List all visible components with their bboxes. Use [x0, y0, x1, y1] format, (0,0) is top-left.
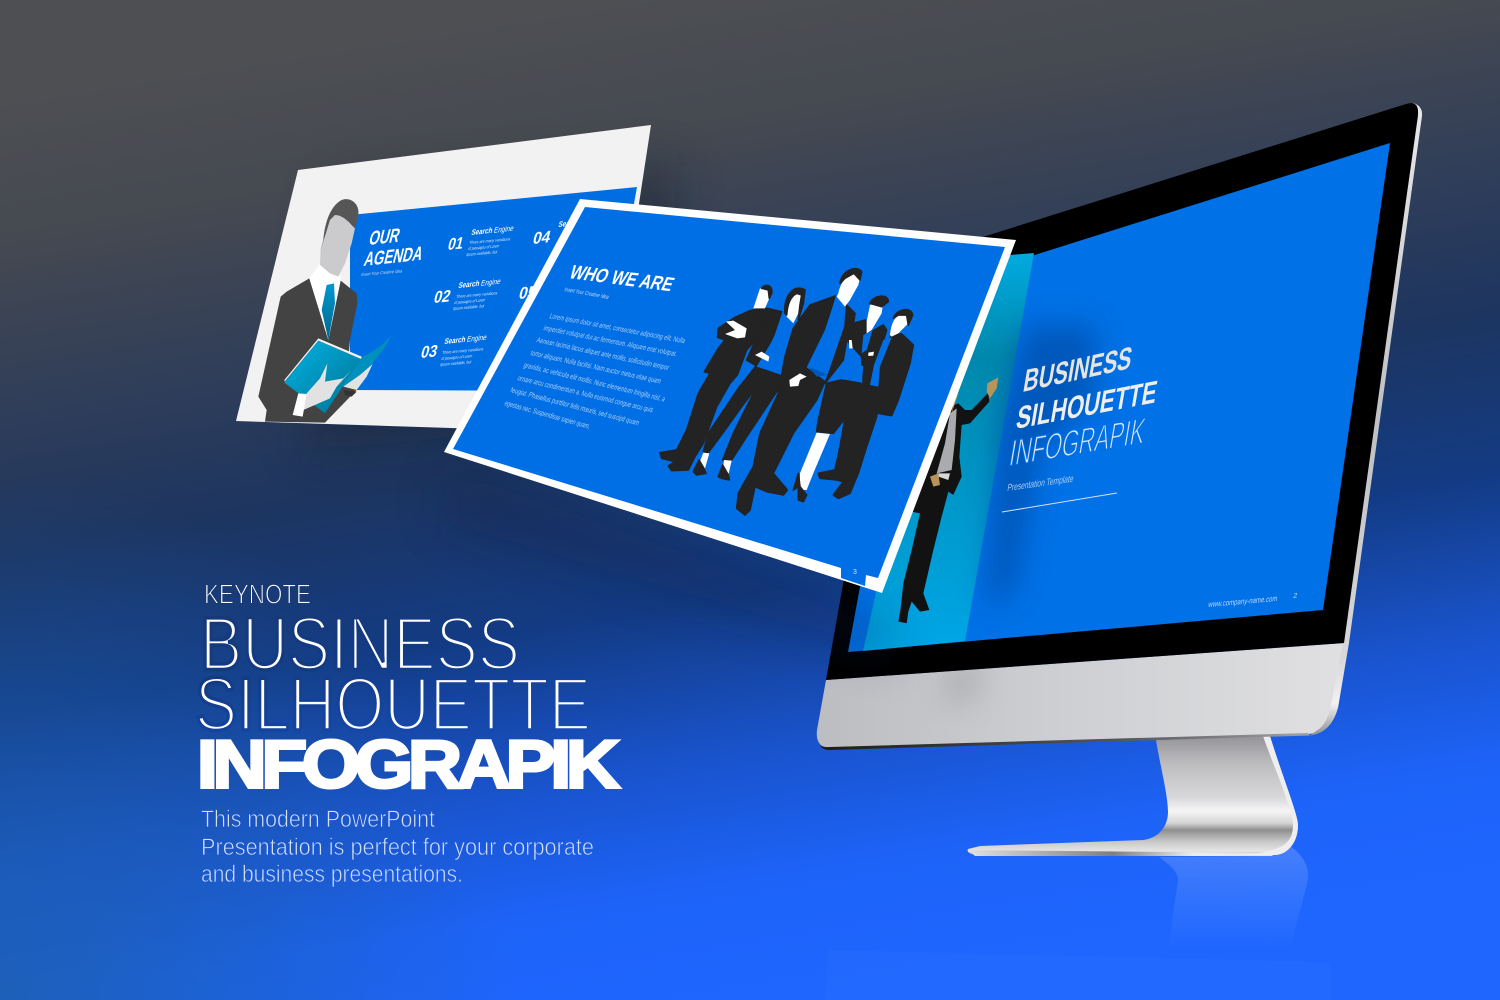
agenda heading: OUR	[367, 225, 402, 250]
agenda numbers	[419, 227, 553, 362]
agenda item details: Ipsum available, but	[466, 249, 499, 257]
agenda heading	[361, 225, 425, 277]
agenda item labels: Search Engine	[558, 216, 602, 229]
silhouette: SILHOUETTE	[195, 662, 591, 746]
team silhouette	[660, 269, 913, 515]
agenda item details: There are many variations	[456, 290, 499, 299]
agenda numbers: 05	[517, 282, 539, 303]
agenda item details: of passages of Lorem	[454, 297, 486, 305]
agenda item details: There are many variations	[442, 346, 485, 355]
page number: 3	[853, 569, 857, 576]
body copy: ornare arcu condimentum a. Nulla euismod congue arcu quis	[516, 373, 655, 414]
description	[201, 806, 594, 888]
infograpik: INFOGRAPIK	[197, 727, 619, 803]
body copy: egestas nec. Suspendisse sapien quam,	[503, 398, 592, 431]
body copy: gravida, ac vehicula elit mollis. Nunc elementum fringilla nisl, a	[522, 360, 668, 404]
agenda item labels: Search Engine	[471, 224, 515, 237]
monitor reflection on floor	[825, 846, 1330, 1000]
description: This modern PowerPoint	[201, 806, 435, 833]
body copy: tortor aliquam. Nulla facilisi. Nam auctor metus vitae quam	[529, 348, 663, 385]
description: Presentation is perfect for your corporate	[201, 834, 594, 861]
body copy: Aenean lacinia lacus aliquet ante mollis, sollicitudin tempor	[535, 335, 671, 372]
agenda item details	[440, 236, 512, 367]
agenda item details: of passages of Lorem	[441, 353, 473, 361]
agenda item details: Ipsum available, but	[440, 359, 473, 367]
slide: our agenda	[236, 125, 651, 433]
screen	[848, 143, 1390, 652]
man far left	[660, 286, 782, 471]
business: BUSINESS	[200, 601, 520, 685]
screen title: INFOGRAPIK	[1007, 410, 1149, 474]
agenda item labels: Search Engine	[444, 333, 488, 346]
main title	[195, 579, 619, 803]
screen title: BUSINESS	[1021, 339, 1135, 399]
body copy: imperdiet volutpat dui ac fermentum. Aliquam erat volutpat.	[542, 323, 679, 358]
screen footer: www.company-name.com	[1207, 594, 1278, 609]
slide: who we are	[444, 199, 1016, 593]
monitor body	[817, 103, 1422, 750]
blue panel	[453, 207, 1005, 586]
agenda numbers: 03	[419, 341, 440, 362]
agenda numbers: 02	[432, 286, 453, 307]
figure pointing on screen	[898, 377, 998, 623]
screen title	[1002, 339, 1160, 512]
screen footer: 2	[1293, 593, 1298, 600]
agenda item details: There are many variations	[469, 236, 512, 245]
heading: WHO WE ARE	[566, 262, 677, 296]
agenda heading: AGENDA	[362, 243, 425, 271]
body copy: Lorem ipsum dolor sit amet, consectetur adipiscing elit. Nulla	[548, 311, 688, 345]
agenda item labels: Search Engine	[458, 277, 502, 290]
man in centre	[737, 269, 862, 515]
keynote label: KEYNOTE	[204, 579, 311, 610]
slide background	[236, 125, 651, 433]
agenda item details: of passages of Lorem	[468, 243, 500, 251]
screen title: SILHOUETTE	[1014, 374, 1160, 436]
description: and business presentations.	[201, 861, 463, 888]
agenda numbers: 01	[446, 233, 466, 254]
slide two shadow	[440, 470, 900, 660]
monitor stand	[968, 736, 1298, 856]
blue panel	[350, 187, 637, 391]
agenda item details: Ipsum available, but	[453, 303, 486, 311]
screen title: Presentation Template	[1006, 474, 1075, 494]
white frame	[444, 199, 1016, 593]
black bezel	[826, 103, 1418, 680]
chin	[817, 643, 1345, 749]
woman in skirt	[793, 296, 888, 502]
woman in trousers	[693, 288, 805, 480]
slide one shadow	[300, 165, 680, 450]
man far right	[818, 310, 913, 498]
body copy: feugiat. Phasellus porttitor felis mauris, sed suscipit quam	[509, 385, 641, 427]
agenda heading: Insert Your Creative Idea	[361, 268, 403, 277]
teal band	[863, 253, 1034, 651]
agenda item labels	[444, 216, 602, 346]
screen shadow	[985, 325, 1095, 610]
agenda numbers: 04	[531, 227, 553, 248]
silver rim	[1310, 103, 1422, 736]
body copy	[503, 311, 688, 431]
subheading: Insert Your Creative Idea	[563, 287, 610, 301]
man reading book	[258, 199, 391, 423]
